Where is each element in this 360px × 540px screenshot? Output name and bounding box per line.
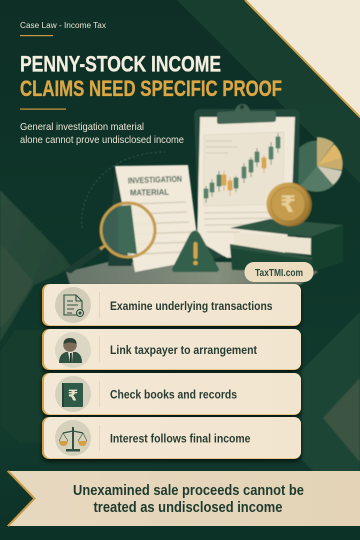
icon: scales (59, 427, 87, 452)
decorative cream corner (245, 0, 360, 118)
website badge (244, 262, 314, 282)
title accent line (20, 108, 66, 110)
title line 2: CLAIMS NEED SPECIFIC PROOF (20, 76, 282, 101)
banner text: Unexamined sale proceeds cannot be (73, 482, 304, 499)
card: interest (42, 417, 301, 459)
subtitle: alone cannot prove undisclosed income (20, 135, 184, 146)
website badge: TaxTMI.com (255, 267, 303, 279)
title line 1: PENNY-STOCK INCOME (20, 52, 221, 76)
banner text: treated as undisclosed income (94, 499, 282, 516)
document heading (128, 174, 182, 197)
card: check books (42, 373, 301, 415)
desk (66, 262, 318, 285)
card: link taxpayer (42, 329, 301, 370)
subtitle (20, 122, 184, 146)
card: examine underlying transactions (42, 284, 301, 326)
icon: magnifying glass (70, 203, 155, 270)
document heading: INVESTIGATION (128, 174, 182, 185)
icon: document (64, 295, 84, 316)
card: check books: Check books and records (110, 390, 237, 402)
icon: pie chart (292, 137, 343, 192)
card: link taxpayer: Link taxpayer to arrangement (110, 345, 257, 357)
header label: Case Law - Income Tax (20, 20, 107, 30)
icon: rupee coin (266, 182, 312, 226)
books (230, 219, 343, 272)
subtitle: General investigation material (20, 122, 144, 133)
card: interest: Interest follows final income (110, 434, 250, 446)
title (20, 52, 282, 101)
candlestick chart (204, 133, 280, 203)
icon: rupee coin: ₹ (280, 192, 296, 218)
clipboard (194, 104, 300, 262)
card: examine underlying transactions: Examine underlying transactions (110, 301, 272, 313)
bottom banner (7, 471, 360, 526)
illustration (66, 104, 343, 285)
clip (217, 104, 276, 124)
investigation document (108, 165, 200, 272)
icon: person (59, 338, 82, 363)
icon: ledger: ₹ (68, 386, 78, 404)
icon: warning triangle (172, 230, 219, 272)
dashed arc (82, 152, 165, 228)
document heading: MATERIAL (130, 187, 169, 197)
paper lines (204, 141, 282, 232)
header accent line (20, 35, 53, 36)
icon: ledger (62, 383, 83, 407)
banner text (73, 482, 304, 516)
